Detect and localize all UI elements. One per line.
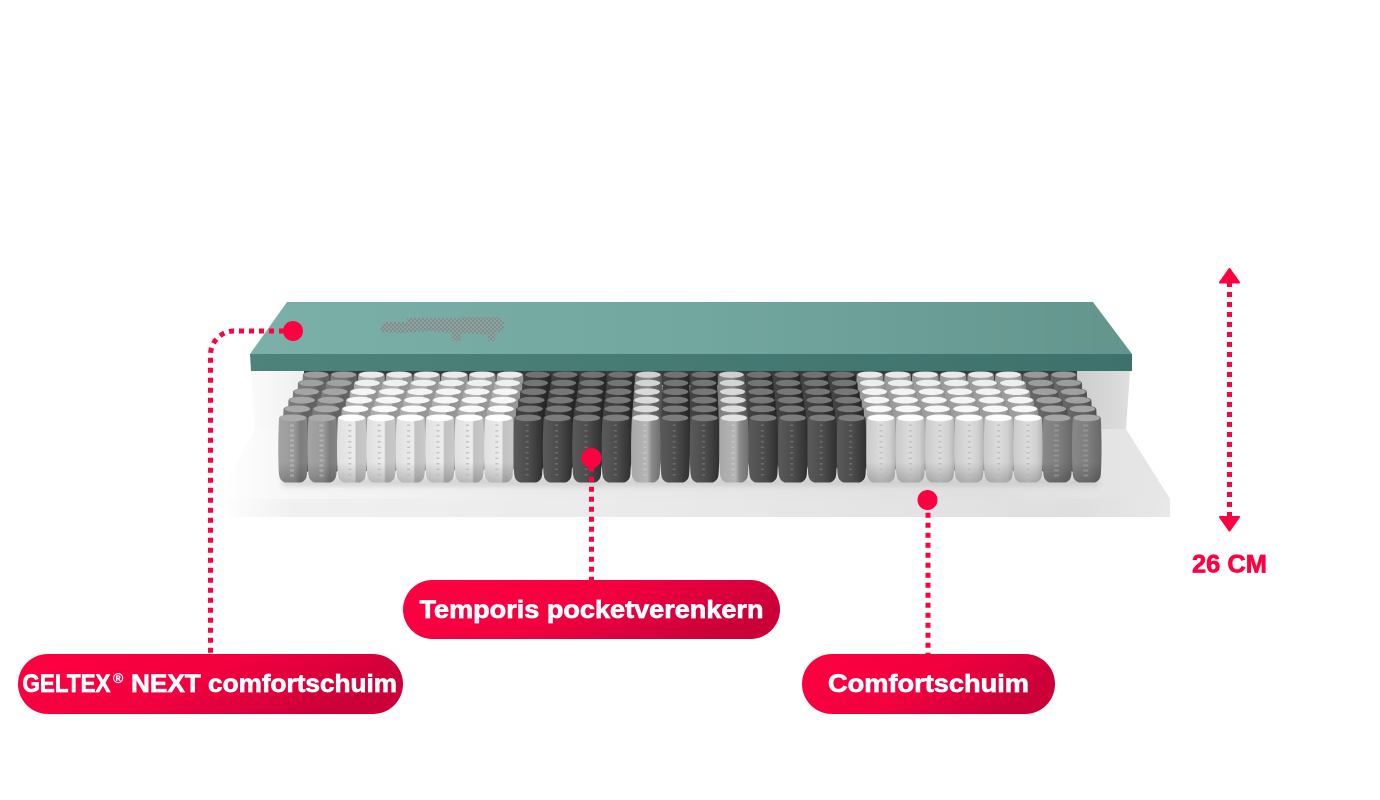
pocket spring core (278, 371, 1102, 482)
bottom comfort foam layer (218, 429, 1170, 517)
label pill: Temporis pocketverenkern (403, 580, 780, 639)
foam side walls (251, 371, 1130, 429)
callout line: pocket springs (582, 448, 602, 580)
label pill: GELTEX NEXT comfortschuim: NEXT comfortschuim (131, 670, 397, 698)
label pill: GELTEX NEXT comfortschuim: GELTEX (22, 670, 111, 698)
label pill: GELTEX NEXT comfortschuim: ® (113, 670, 124, 686)
callout line: GELTEX (210, 321, 303, 654)
dithered logo mark on foam (380, 317, 504, 341)
height label: 26 CM (1192, 550, 1267, 578)
label pill: Comfortschuim (802, 654, 1055, 714)
top GELTEX NEXT comfort foam layer (250, 302, 1132, 371)
label pill: Comfortschuim: Comfortschuim (828, 670, 1029, 698)
callout line: comfort foam (918, 490, 938, 654)
label pill: Temporis pocketverenkern: Temporis pocketverenkern (420, 596, 764, 624)
label pill: GELTEX NEXT comfortschuim (18, 654, 403, 714)
height arrow (1220, 269, 1239, 530)
